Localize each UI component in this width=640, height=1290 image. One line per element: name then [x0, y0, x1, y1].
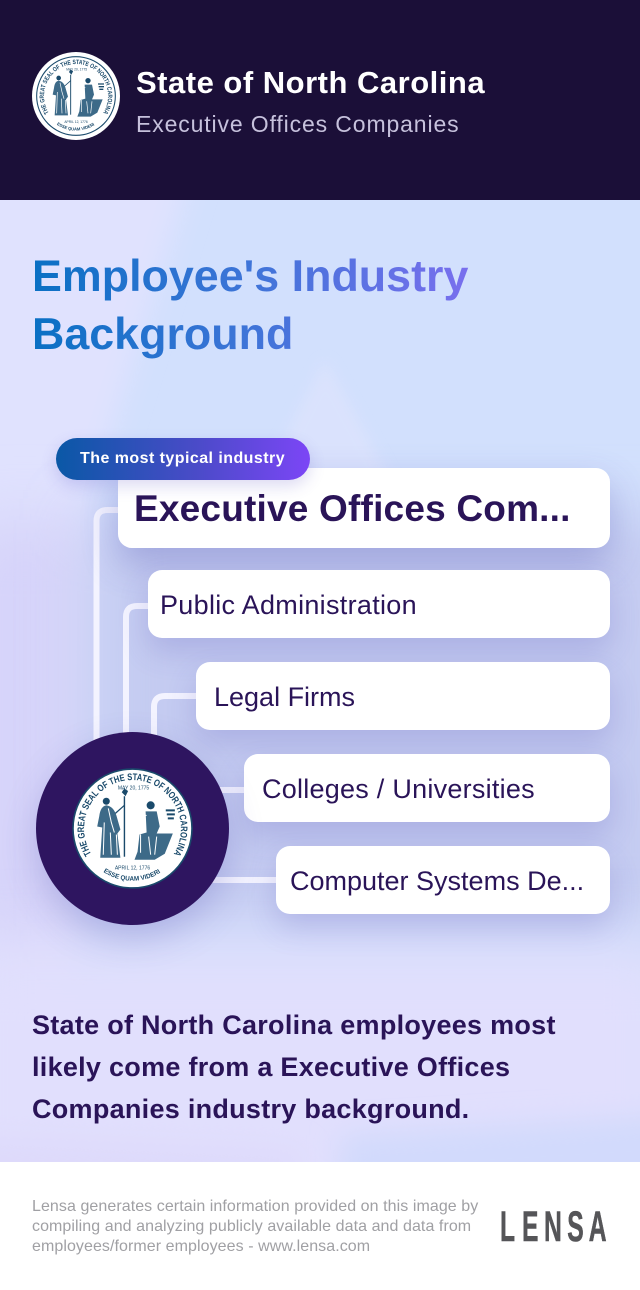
icon: state seal logo: APRIL 12, 1776 [64, 120, 88, 124]
summary text: State of North Carolina employees most [32, 1010, 556, 1040]
icon: state seal logo: THE GREAT SEAL OF THE STATE OF NORTH CAROLINA [40, 60, 112, 116]
card: Public Administration: Public Administration [160, 590, 417, 620]
card: Computer Systems Design [276, 846, 610, 914]
subtitle: Executive Offices Companies [136, 111, 459, 137]
card: Executive Offices Companies [118, 468, 610, 548]
heading: Employee's Industry [32, 251, 468, 301]
card: Colleges / Universities [244, 754, 610, 822]
heading: Background [32, 309, 293, 359]
card: Executive Offices Companies: Executive Offices Com... [134, 488, 571, 529]
connector lines [94, 507, 276, 883]
card: Legal Firms: Legal Firms [214, 682, 355, 712]
icon: state seal logo [32, 52, 120, 140]
card: Computer Systems Design: Computer Systems De... [290, 866, 584, 896]
disclaimer text: compiling and analyzing publicly available data and data from [32, 1218, 471, 1235]
disclaimer text: Lensa generates certain information provided on this image by [32, 1198, 478, 1215]
header panel [0, 0, 640, 200]
card: Public Administration [148, 570, 610, 638]
summary text: Companies industry background. [32, 1094, 469, 1124]
icon: state seal logo: ESSE QUAM VIDERI [56, 122, 94, 131]
disclaimer text [32, 1198, 478, 1255]
card: Colleges / Universities: Colleges / Universities [262, 774, 535, 804]
icon: large seal medallion: ESSE QUAM VIDERI [104, 868, 160, 882]
title: State of North Carolina [136, 65, 485, 100]
icon: large seal medallion: MAY 20, 1775 [118, 786, 149, 792]
logo: LENSA: LENSA [500, 1204, 607, 1251]
icon: large seal medallion: THE GREAT SEAL OF THE STATE OF NORTH CAROLINA [78, 773, 188, 858]
summary text [32, 1010, 556, 1124]
badge: most typical industry: The most typical industry [80, 450, 285, 467]
card: Legal Firms [196, 662, 610, 730]
summary text: likely come from a Executive Offices [32, 1052, 510, 1082]
heading [32, 247, 472, 367]
icon: large seal medallion: APRIL 12, 1776 [115, 865, 150, 871]
icon: state seal logo: MAY 20, 1775 [66, 67, 87, 71]
background panel [0, 200, 640, 1162]
footer panel [0, 1162, 640, 1290]
disclaimer text: employees/former employees - www.lensa.com [32, 1238, 370, 1255]
icon: large seal medallion [36, 732, 229, 925]
badge: most typical industry [56, 438, 310, 480]
